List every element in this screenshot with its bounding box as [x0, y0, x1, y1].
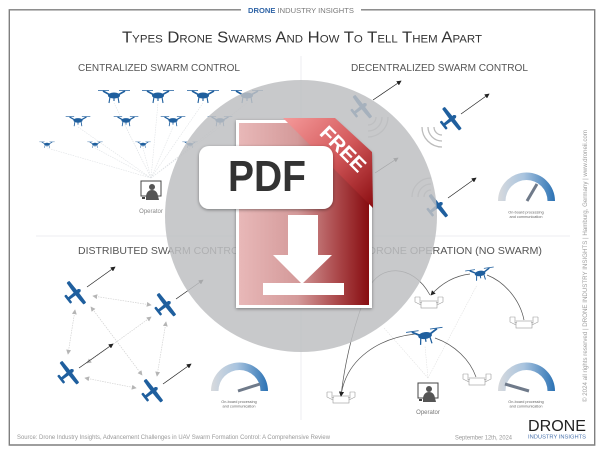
gauge caption: On-board processing	[508, 400, 544, 404]
gauge needle	[505, 384, 529, 391]
side copyright text: © 2024 all rights reserved | DRONE INDUSTRY INSIGHTS | Hamburg, Germany | www.droneii.com	[581, 130, 589, 402]
communication links	[68, 296, 166, 388]
pdf label	[199, 146, 333, 209]
gauge needle	[238, 384, 260, 391]
planes	[343, 93, 465, 224]
gauge caption: On-board processing	[221, 400, 257, 404]
signal waves	[368, 117, 442, 197]
control links	[47, 103, 247, 178]
gauge caption: and communication	[223, 405, 255, 409]
date: September 12th, 2024	[455, 434, 512, 442]
flight paths	[341, 271, 524, 396]
pdf download icon	[199, 118, 373, 308]
operator icon	[418, 383, 438, 402]
operator label: Operator	[416, 410, 440, 416]
heading: centralized: CENTRALIZED SWARM CONTROL	[78, 62, 240, 74]
gauge caption: and communication	[510, 215, 542, 219]
operator icon	[141, 181, 161, 200]
pdf text: PDF	[228, 152, 306, 201]
heading: decentralized: DECENTRALIZED SWARM CONTROL	[351, 62, 528, 74]
source note: Source: Drone Industry Insights, Advancement Challenges in UAV Swarm Formation Control: A Comprehensive Review	[17, 434, 330, 441]
grey overlay circle	[165, 80, 437, 352]
operator label: Operator	[139, 209, 163, 215]
logo subtitle: INDUSTRY INSIGHTS	[528, 434, 587, 440]
drone formation	[39, 90, 263, 148]
planes	[52, 279, 179, 409]
gauge	[211, 362, 268, 391]
drones	[406, 267, 495, 347]
gauge needle	[527, 184, 537, 201]
logo word: DRONE	[528, 418, 586, 435]
header brand: DRONE INDUSTRY INSIGHTS	[248, 6, 354, 15]
panel: centralized swarm control	[39, 62, 263, 215]
free label: FREE	[315, 122, 370, 177]
download arrow	[263, 215, 344, 295]
control links	[384, 285, 477, 378]
gauge caption: On-board processing	[508, 210, 544, 214]
heading arrows	[79, 267, 203, 384]
gauge	[498, 172, 555, 201]
landing pads	[327, 297, 538, 403]
heading: distributed: DISTRIBUTED SWARM CONTROL	[78, 245, 245, 257]
panel: decentralized swarm control	[343, 62, 555, 224]
ribbon	[283, 118, 373, 208]
heading: single drone: SINGLE DRONE OPERATION (NO SWARM)	[326, 245, 542, 257]
gauge	[498, 362, 555, 391]
panel: distributed swarm control	[52, 245, 268, 409]
panel: single drone operation	[326, 245, 555, 416]
heading arrows	[373, 81, 489, 198]
gauge caption: and communication	[510, 405, 542, 409]
logo	[528, 418, 587, 440]
document	[236, 120, 372, 308]
title: Types Drone Swarms And How To Tell Them Apart	[122, 30, 482, 46]
